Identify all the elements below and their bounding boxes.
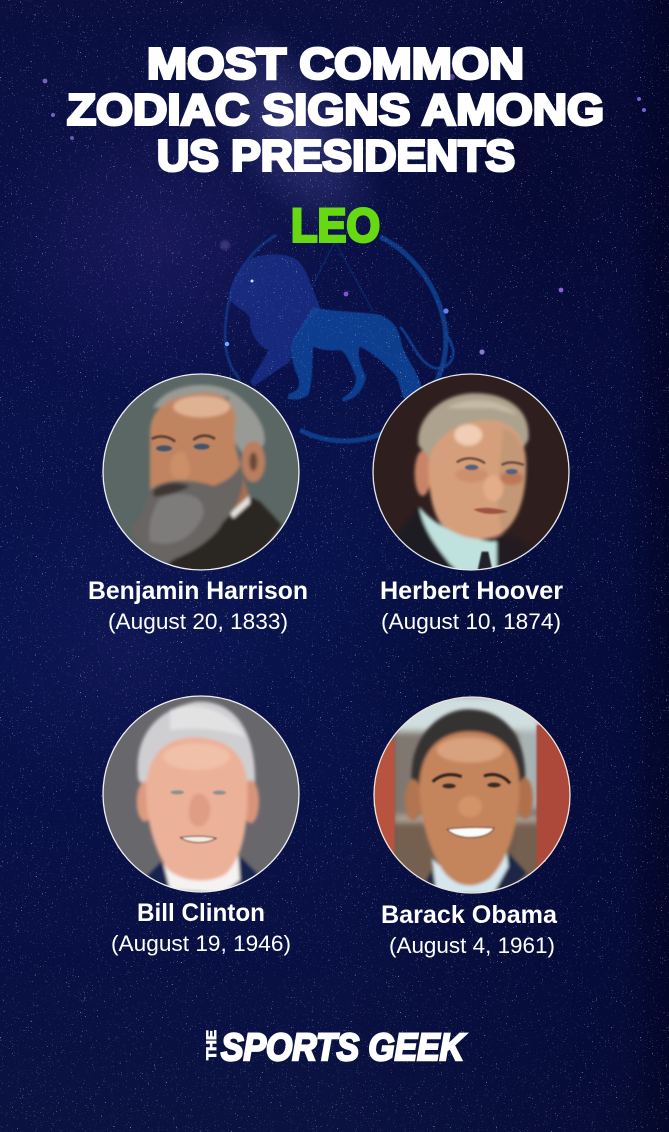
- title: MOST COMMON: [147, 40, 524, 88]
- logo: The Sports Geek: THE: [203, 1030, 219, 1060]
- caption: Herbert Hoover: [380, 578, 563, 634]
- caption: Bill Clinton: [111, 900, 291, 956]
- lion silhouette: [228, 254, 453, 402]
- caption: Bill Clinton: Bill Clinton: [137, 900, 265, 927]
- caption: Herbert Hoover: Herbert Hoover: [380, 578, 563, 605]
- title: [67, 40, 604, 180]
- portrait: Barack Obama: [373, 696, 571, 894]
- title: ZODIAC SIGNS AMONG: [67, 86, 604, 134]
- heading: LEO: LEO: [291, 198, 380, 252]
- constellation: Leo lion in a ring: [225, 235, 453, 441]
- caption: Herbert Hoover: (August 10, 1874): [381, 609, 561, 634]
- caption: Benjamin Harrison: (August 20, 1833): [108, 609, 288, 634]
- caption: Barack Obama: Barack Obama: [381, 902, 557, 929]
- constellation lines: [312, 242, 373, 312]
- caption: Benjamin Harrison: [88, 578, 308, 634]
- portrait: Bill Clinton: [102, 695, 300, 893]
- portrait: Herbert Hoover: [372, 373, 570, 571]
- caption: Benjamin Harrison: Benjamin Harrison: [88, 578, 308, 605]
- title: US PRESIDENTS: [157, 132, 515, 180]
- logo: The Sports Geek: SPORTS GEEK: [221, 1027, 466, 1069]
- portrait: Benjamin Harrison: [102, 373, 300, 571]
- caption: Barack Obama: (August 4, 1961): [389, 933, 555, 958]
- caption: Bill Clinton: (August 19, 1946): [111, 931, 291, 956]
- caption: Barack Obama: [381, 902, 557, 958]
- ring: [225, 235, 446, 441]
